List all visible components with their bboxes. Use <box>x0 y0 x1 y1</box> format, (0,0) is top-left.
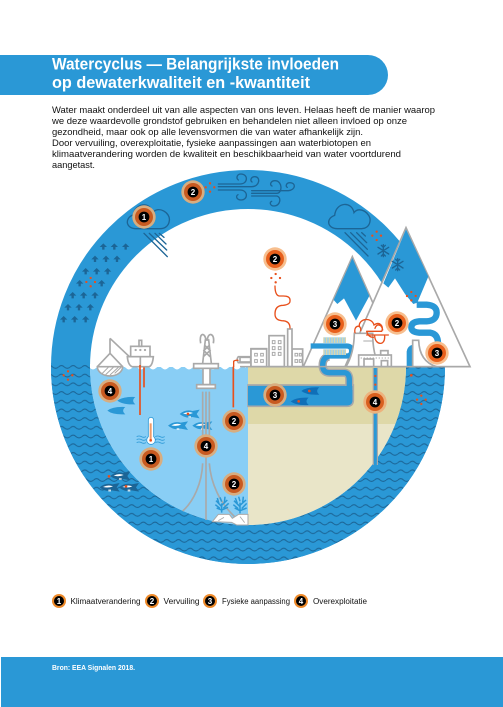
small mountain snow <box>334 258 369 321</box>
groundwater and coast details <box>291 368 427 465</box>
icon: coral <box>215 497 247 513</box>
icon: ship <box>127 340 153 367</box>
intro text: we deze waardevolle grondstof gebruiken en behandelen niet alleen invloed op onze <box>51 115 407 126</box>
dots: snow pollution <box>371 230 382 241</box>
icon: rain cloud <box>127 205 169 257</box>
dots: ocean pollution <box>62 370 73 381</box>
big mountain snow <box>383 229 428 304</box>
dam <box>413 340 437 367</box>
intro text: gezondheid, maar ook op alle levensvormen die van water afhankelijk zijn. <box>52 126 363 137</box>
big mountain <box>345 228 470 367</box>
dots: pollution <box>204 182 215 193</box>
badge: 3 river <box>263 383 287 407</box>
footer <box>1 657 503 707</box>
icon: thermometer <box>137 417 165 444</box>
intro text: klimaatverandering worden de kwaliteit en beschikbaarheid van water voortdurend <box>52 148 401 159</box>
underwater details <box>100 365 248 525</box>
icon: dam stripes <box>323 337 346 355</box>
fish in river <box>291 387 319 405</box>
fish in lagoon <box>168 410 212 430</box>
badge: 2 air on ring: 2 <box>191 188 196 197</box>
badge: 2 power plant: 2 <box>395 319 400 328</box>
badge: 4 oil rig: 4 <box>204 442 209 451</box>
left side details: climate on ring <box>60 182 267 388</box>
badge: 3 river: 3 <box>273 391 278 400</box>
smoke <box>275 286 290 328</box>
badge: 1 climate on ring: 1 <box>142 213 147 222</box>
pale ground <box>248 424 408 527</box>
well pipe <box>374 368 376 465</box>
horizon line <box>240 364 470 369</box>
title banner <box>0 55 388 95</box>
legend <box>52 594 368 608</box>
badge: 3 mountain river <box>425 341 449 365</box>
badge: 1 temperature <box>139 447 163 471</box>
orange discharge pipes <box>140 365 233 415</box>
badge: 2 discharge <box>222 409 246 433</box>
icon: factory outlet <box>234 349 267 367</box>
legend: Fysieke aanpassing: Fysieke aanpassing <box>222 597 290 606</box>
source: Bron: EEA Signalen 2018. <box>52 665 135 672</box>
right side details: mountains and industry <box>218 174 470 406</box>
badge: 2 smoke: 2 <box>273 255 278 264</box>
intro text: Door vervuiling, overexploitatie, fysieke aanpassingen aan waterbiotopen en <box>52 137 371 148</box>
badge: 2 smoke <box>263 247 287 271</box>
intro text: aangetast. <box>52 159 95 170</box>
underwater and ground cross-section <box>88 367 408 527</box>
icon: rocks <box>212 514 248 525</box>
orange steam <box>355 320 388 343</box>
badge: 4 well <box>363 390 387 414</box>
legend: Klimaatverandering: Klimaatverandering <box>70 597 140 606</box>
water cycle ring <box>70 190 426 544</box>
river: big mountain <box>411 305 438 343</box>
badge: 2 seabed: 2 <box>232 480 237 489</box>
icon: cooling tower <box>346 333 379 367</box>
title: op dewaterkwaliteit en -kwantiteit <box>52 74 310 92</box>
icon: snow cloud <box>329 204 370 256</box>
icon: forest arrows <box>60 243 129 322</box>
fish in ring <box>100 472 139 492</box>
icon: dredger <box>97 338 129 376</box>
legend: Vervuiling <box>145 594 200 608</box>
badge: 1 climate on ring <box>132 205 156 229</box>
river: mountain to ground <box>248 346 353 406</box>
badge: 4 oil rig <box>194 434 218 458</box>
badge: 4 fishing: 4 <box>108 387 113 396</box>
icon: wind <box>218 174 294 206</box>
badge: 2 power plant <box>385 311 409 335</box>
legend: Overexploitatie: 4 <box>299 597 304 606</box>
legend: Fysieke aanpassing <box>203 594 290 608</box>
shoal: blue fish <box>107 397 135 414</box>
ring waves <box>51 363 445 564</box>
badge: 2 air on ring <box>181 180 205 204</box>
badge: 3 dam: 3 <box>333 320 338 329</box>
title: Watercyclus — Belangrijkste invloeden <box>52 56 339 74</box>
icon: city <box>240 329 303 367</box>
badge: 2 discharge: 2 <box>232 417 237 426</box>
badge: 2 seabed <box>222 472 246 496</box>
dots: coast pollution <box>410 374 427 405</box>
legend: Overexploitatie <box>294 594 368 608</box>
legend: Overexploitatie: Overexploitatie <box>313 597 368 606</box>
small mountain <box>303 257 401 367</box>
icon: power plant <box>359 351 391 367</box>
badge: 4 fishing <box>98 379 122 403</box>
badge: 3 mountain river: 3 <box>435 349 440 358</box>
legend: Fysieke aanpassing: 3 <box>208 597 213 606</box>
sand layer <box>248 367 408 424</box>
icon: oil rig <box>194 335 218 388</box>
badge: 1 temperature: 1 <box>149 455 154 464</box>
legend: Vervuiling: 2 <box>150 597 155 606</box>
badge: 4 well: 4 <box>373 398 378 407</box>
icon: snowflake <box>378 245 389 257</box>
dots: forest pollution <box>85 277 96 287</box>
sea surface <box>90 362 246 370</box>
legend: Vervuiling: Vervuiling <box>164 597 200 606</box>
dots: smoke <box>270 273 281 283</box>
icon: snowflake on mountain <box>392 259 403 271</box>
legend: Klimaatverandering <box>52 594 140 608</box>
intro text: Water maakt onderdeel uit van alle aspecten van ons leven. Helaas heeft de manier waarop <box>52 104 435 115</box>
rig legs <box>183 392 235 520</box>
dots: mountain pollution <box>406 291 417 301</box>
light water <box>88 367 248 527</box>
waterfall <box>407 345 413 367</box>
legend: Klimaatverandering: 1 <box>57 597 62 606</box>
badge: 3 dam <box>323 312 347 336</box>
